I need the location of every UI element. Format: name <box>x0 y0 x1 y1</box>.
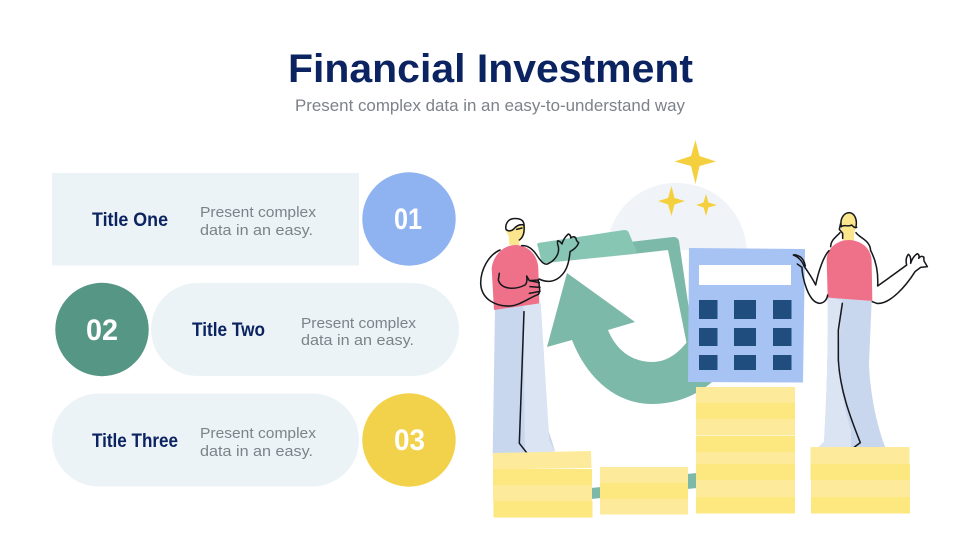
panel: item one <box>52 172 456 266</box>
panel: item three <box>52 393 456 487</box>
text block: item three description: Present complex <box>200 425 317 442</box>
heading: title one: Title One <box>92 210 168 231</box>
heading: title two: Title Two <box>192 320 265 341</box>
icon: calculator <box>688 248 805 382</box>
heading: title three: Title Three <box>92 431 178 452</box>
person: woman <box>793 213 927 447</box>
icon: sparkles <box>658 140 717 216</box>
icon: curved arrow <box>547 273 712 404</box>
background semicircle <box>606 183 747 250</box>
icon: clipboard frame <box>537 230 692 345</box>
text block: item one description: Present complex <box>200 204 317 221</box>
text block: item one description <box>200 204 317 239</box>
text block: item two description: data in an easy. <box>301 332 414 349</box>
icon: connector bars <box>591 473 697 499</box>
number badge 02: 02 <box>86 314 118 347</box>
person: man <box>481 219 579 455</box>
text block: item two description: Present complex <box>301 315 417 332</box>
coin stack: middle <box>600 467 688 514</box>
number badge 02 <box>55 283 149 376</box>
text block: item two description <box>301 315 417 349</box>
number badge 01 <box>362 172 456 266</box>
number badge 03: 03 <box>394 424 425 457</box>
text block: item one description: data in an easy. <box>200 222 313 239</box>
coin stack: tall <box>696 387 795 514</box>
panel: item two <box>55 283 459 376</box>
coin stack: right <box>810 447 910 514</box>
number badge 01: 01 <box>394 203 422 236</box>
title: Financial Investment <box>288 47 693 91</box>
number badge 03 <box>362 393 456 487</box>
coin stack: left <box>493 451 592 518</box>
illustration: finance scene <box>481 140 927 518</box>
text block: item three description: data in an easy. <box>200 443 313 460</box>
text block: item three description <box>200 425 317 460</box>
subtitle: Present complex data in an easy-to-understand way <box>295 97 686 115</box>
